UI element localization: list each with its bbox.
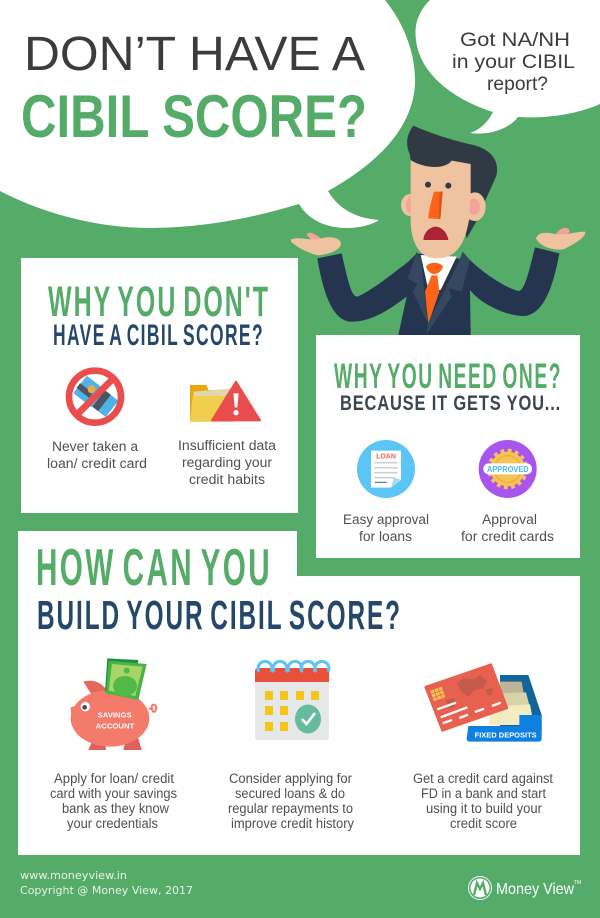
- panel: why you need one: [316, 335, 580, 558]
- panel heading: WHY YOU DON'T: [48, 278, 270, 326]
- icon: folder with warning triangle: [190, 382, 260, 422]
- icon: approved badge: APPROVED: [487, 465, 529, 474]
- text: never taken a loan: Never taken a: [52, 439, 139, 454]
- text: easy approval: [343, 512, 429, 544]
- icon: loan document: LOAN: [376, 454, 396, 461]
- text: credit card against FD: [413, 771, 553, 831]
- icon: credit card and fixed deposits box: [425, 664, 542, 742]
- icon: approved badge: [479, 440, 537, 498]
- text: apply with savings bank: bank as they know: [62, 801, 169, 816]
- footer: Money View logo: Money View: [496, 881, 574, 898]
- text: credit card against FD: Get a credit card against: [413, 771, 553, 786]
- icon: piggy bank with money: ACCOUNT: [96, 721, 135, 730]
- text: apply with savings bank: Apply for loan/ credit: [54, 771, 174, 786]
- text: apply with savings bank: your credentials: [67, 816, 158, 831]
- footer: website and copyright: [20, 869, 193, 897]
- text: approval for credit cards: [461, 512, 554, 544]
- text: easy approval: Easy approval: [343, 512, 429, 527]
- text: credit card against FD: credit score: [450, 816, 517, 831]
- speech bubble: NA/NH question: in your CIBIL: [452, 52, 575, 73]
- speech bubble: NA/NH question: Got NA/NH: [460, 30, 570, 51]
- text: insufficient data: Insufficient data: [178, 438, 276, 453]
- text: never taken a loan: [47, 439, 147, 471]
- text: approval for credit cards: Approval: [482, 512, 537, 527]
- text: apply with savings bank: card with your savings: [50, 786, 177, 801]
- text: credit card against FD: FD in a bank and start: [421, 786, 546, 801]
- icon: credit card and fixed deposits box: FIXED DEPOSITS: [475, 730, 537, 739]
- text: secured loans: secured loans & do: [235, 786, 345, 801]
- speech bubble: main title: [0, 0, 415, 228]
- text: apply with savings bank: [50, 771, 177, 831]
- panel heading: HOW CAN YOU: [36, 539, 272, 597]
- speech bubble: NA/NH question: report?: [487, 74, 548, 95]
- text: secured loans: regular repayments to: [228, 801, 353, 816]
- panel subheading: HAVE A CIBIL SCORE?: [53, 319, 264, 352]
- icon: loan document: [357, 440, 415, 498]
- icon: piggy bank with money: [71, 658, 156, 750]
- panel: how can you build your CIBIL score: [18, 531, 580, 855]
- icon: calendar with check: [255, 661, 329, 740]
- icon: crossed-out credit cards: [69, 371, 121, 423]
- panel: why you don't have a CIBIL score: [21, 258, 298, 513]
- speech bubble: NA/NH question: [416, 0, 600, 134]
- footer: website and copyright: Copyright @ Money View, 2017: [20, 884, 193, 897]
- title line 2: CIBIL SCORE?: [21, 83, 367, 150]
- text: credit card against FD: using it to build your: [426, 801, 542, 816]
- text: secured loans: [228, 771, 354, 831]
- text: insufficient data: credit habits: [189, 472, 265, 487]
- footer: website and copyright: www.moneyview.in: [20, 869, 127, 882]
- text: insufficient data: regarding your: [182, 455, 273, 470]
- icon: piggy bank with money: SAVINGS: [98, 711, 132, 720]
- text: secured loans: Consider applying for: [229, 771, 352, 786]
- footer: Money View logo: [468, 876, 581, 900]
- text: secured loans: improve credit history: [231, 816, 354, 831]
- text: easy approval: for loans: [359, 529, 412, 544]
- text: never taken a loan: loan/ credit card: [47, 456, 147, 471]
- footer: Money View logo: TM: [574, 880, 581, 886]
- text: insufficient data: [178, 438, 276, 487]
- character: shrugging businessman: [291, 126, 585, 335]
- title line 1: DON’T HAVE A: [24, 28, 365, 81]
- text: approval for credit cards: for credit cards: [461, 529, 554, 544]
